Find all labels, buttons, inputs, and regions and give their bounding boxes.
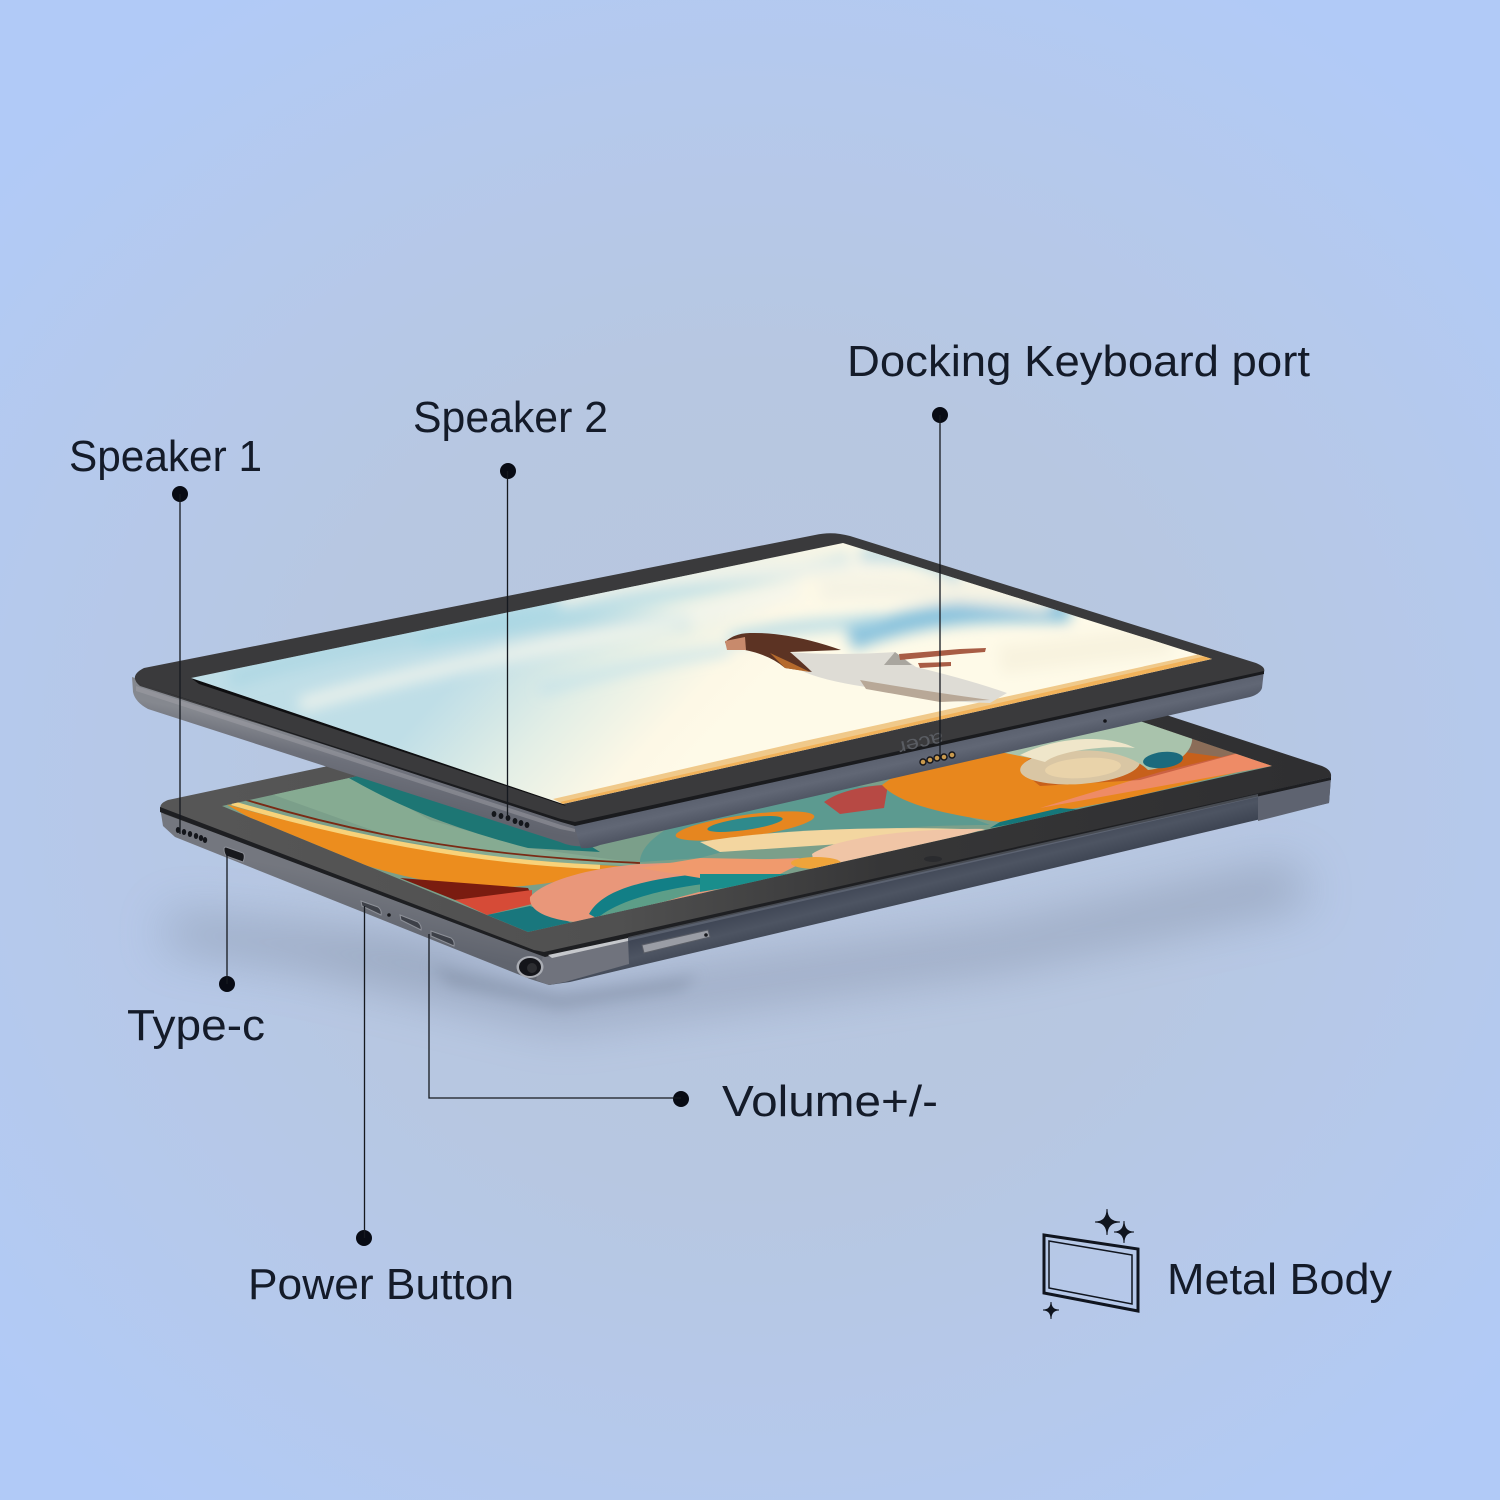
audio jack [516, 956, 544, 978]
callout: Type-c [127, 852, 265, 1050]
label: Metal Body: Metal Body [1167, 1255, 1392, 1304]
upper tablet bezel [135, 533, 1264, 822]
type-c port [224, 847, 244, 862]
upper tablet screen photo [180, 530, 1220, 810]
woman in white dress [725, 633, 1007, 703]
callout: Volume+/-: Volume+/- [722, 1077, 938, 1126]
speaker 1 grille [176, 827, 207, 843]
lower tablet side edge right [544, 777, 1331, 985]
callout: Docking Keyboard port: Docking Keyboard port [847, 337, 1310, 386]
volume buttons [400, 915, 454, 946]
icon: metal body tablet with sparkles [1043, 1209, 1138, 1319]
callout: Power Button: Power Button [248, 1260, 514, 1309]
wallpaper teal band [349, 776, 600, 852]
power button [361, 901, 381, 915]
callout: Power Button [248, 906, 514, 1309]
lower tablet side edge left [160, 807, 565, 985]
callout: Docking Keyboard port [847, 337, 1310, 757]
SIM tray [642, 930, 710, 953]
lower tablet wallpaper [222, 722, 1272, 932]
tablet drop shadow [165, 865, 1310, 1025]
horizon sand strip [553, 654, 1212, 804]
callout: Type-c: Type-c [127, 1001, 265, 1050]
wallpaper peach blob [530, 858, 800, 923]
wallpaper right swirl [882, 752, 1269, 822]
wallpaper centre swirl [640, 785, 990, 862]
wallpaper red wedges [400, 878, 530, 900]
lower tablet end sections [536, 938, 629, 985]
docking pogo pins [920, 752, 955, 765]
callout: Speaker 1: Speaker 1 [69, 432, 262, 481]
lower tablet bezel [160, 638, 1331, 953]
wallpaper orange swoosh [226, 804, 646, 888]
wallpaper lower centre bands [640, 858, 808, 878]
callout: Speaker 2: Speaker 2 [413, 393, 608, 442]
camera hole [1103, 719, 1107, 723]
callout: Speaker 1 [69, 432, 262, 834]
lower tablet front camera [924, 856, 942, 862]
acer logo: acer [895, 727, 946, 758]
upper tablet side edge left [132, 677, 600, 846]
speaker 2 grille [492, 811, 529, 828]
lower tablet [160, 716, 1332, 985]
upper tablet side edge right [573, 670, 1264, 848]
mic hole [387, 913, 391, 917]
wallpaper pale green band [273, 777, 642, 865]
sky wisps [230, 555, 1170, 705]
callout: Volume+/- [429, 934, 938, 1126]
callout: Speaker 2 [413, 393, 608, 815]
upper tablet [132, 530, 1264, 848]
